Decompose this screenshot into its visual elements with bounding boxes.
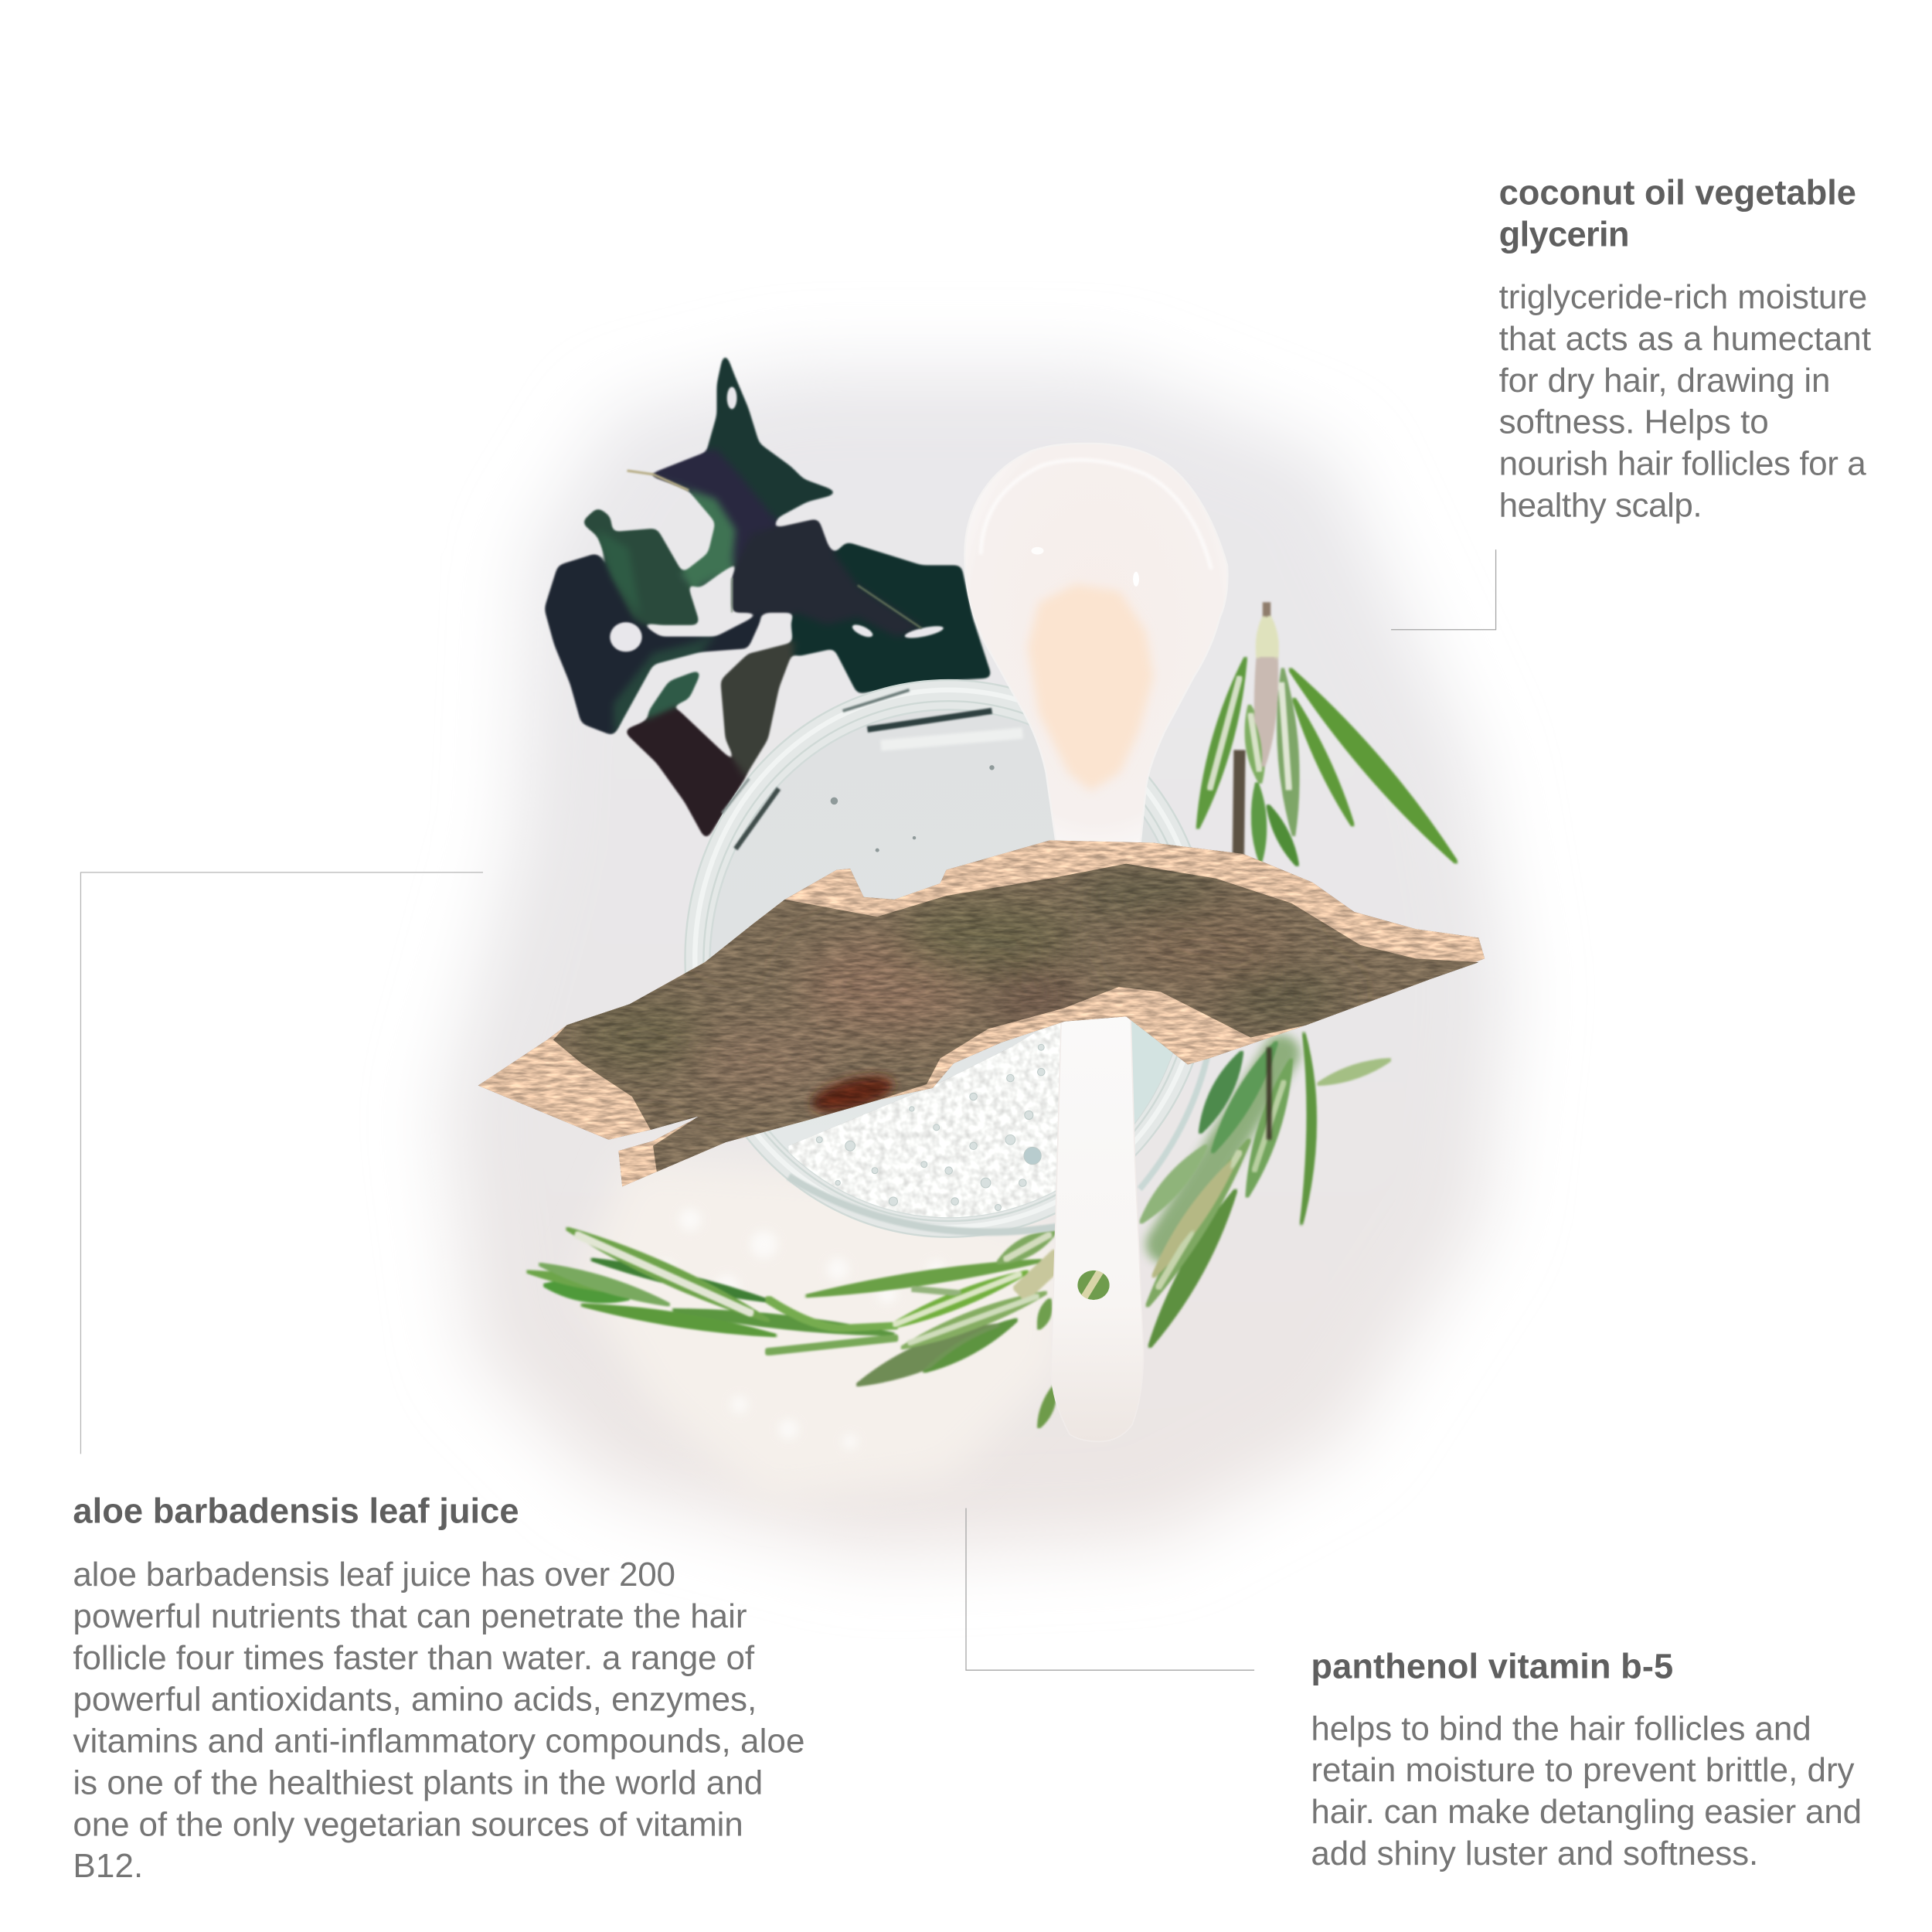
heading: coconut oil bbox=[1499, 173, 1856, 254]
body: aloe: vitamins and anti-inflammatory compounds, aloe bbox=[73, 1723, 804, 1760]
bark outer brown surface bbox=[543, 850, 1491, 1183]
text block: coconut oil vegetable glycerin bbox=[1499, 173, 1871, 525]
body: aloe: follicle four times faster than water. a range of bbox=[73, 1639, 755, 1677]
spoon bowl bbox=[964, 444, 1227, 850]
body: panthenol: retain moisture to prevent brittle, dry bbox=[1311, 1751, 1855, 1789]
body: coconut oil: triglyceride-rich moisture bbox=[1499, 278, 1867, 316]
heading: aloe: aloe barbadensis leaf juice bbox=[73, 1492, 519, 1531]
spoon handle bbox=[1051, 986, 1144, 1441]
body: coconut oil: softness. Helps to bbox=[1499, 403, 1769, 441]
body: aloe: aloe barbadensis leaf juice has over 200 bbox=[73, 1556, 675, 1594]
bark strip bbox=[478, 840, 1491, 1186]
glass jar bbox=[685, 680, 1219, 1244]
salt crystals pile bbox=[579, 1158, 1072, 1503]
body: coconut oil: for dry hair, drawing in bbox=[1499, 362, 1830, 400]
body: coconut oil: healthy scalp. bbox=[1499, 487, 1702, 525]
white ceramic spoon bbox=[964, 444, 1227, 1441]
body: coconut oil: that acts as a humectant bbox=[1499, 320, 1871, 358]
heading: coconut oil: coconut oil vegetable bbox=[1499, 173, 1856, 213]
rosemary sprig right, lower part bbox=[1141, 1032, 1389, 1347]
body: panthenol: hair. can make detangling easier and bbox=[1311, 1793, 1862, 1831]
dried leaves bbox=[545, 350, 992, 840]
body: coconut oil: nourish hair follicles for a bbox=[1499, 445, 1866, 483]
body: panthenol: add shiny luster and softness. bbox=[1311, 1835, 1758, 1872]
liquid in spoon bbox=[1028, 584, 1153, 791]
bark inner cream wood bbox=[478, 840, 1485, 1186]
callout line: panthenol bbox=[966, 1509, 1254, 1670]
body: aloe bbox=[73, 1556, 804, 1885]
soft background vignette bbox=[444, 369, 1509, 1553]
body: panthenol: helps to bind the hair follicles and bbox=[1311, 1709, 1811, 1747]
text block: panthenol vitamin b-5 bbox=[1311, 1647, 1862, 1872]
rosemary sprig lower left bbox=[527, 1229, 1060, 1427]
body: aloe: B12. bbox=[73, 1847, 143, 1885]
foam inside jar bbox=[788, 1021, 1172, 1218]
body: aloe: powerful nutrients that can penetrate the hair bbox=[73, 1597, 747, 1635]
spoon handle hole bbox=[1077, 1269, 1110, 1301]
rosemary sprig right, upper part bbox=[1198, 604, 1457, 865]
heading: coconut oil: glycerin bbox=[1499, 215, 1630, 254]
callout line: aloe bbox=[80, 872, 483, 1454]
body: panthenol bbox=[1311, 1709, 1862, 1872]
body: aloe: is one of the healthiest plants in the world and bbox=[73, 1764, 763, 1801]
central ingredient photo bbox=[444, 350, 1509, 1553]
body: aloe: one of the only vegetarian sources of vitamin bbox=[73, 1805, 743, 1843]
body: coconut oil bbox=[1499, 278, 1871, 525]
text block: aloe barbadensis leaf juice bbox=[73, 1492, 804, 1885]
body: aloe: powerful antioxidants, amino acids, enzymes, bbox=[73, 1681, 757, 1719]
callout line: coconut oil bbox=[1391, 549, 1496, 630]
heading: panthenol: panthenol vitamin b-5 bbox=[1311, 1647, 1673, 1686]
